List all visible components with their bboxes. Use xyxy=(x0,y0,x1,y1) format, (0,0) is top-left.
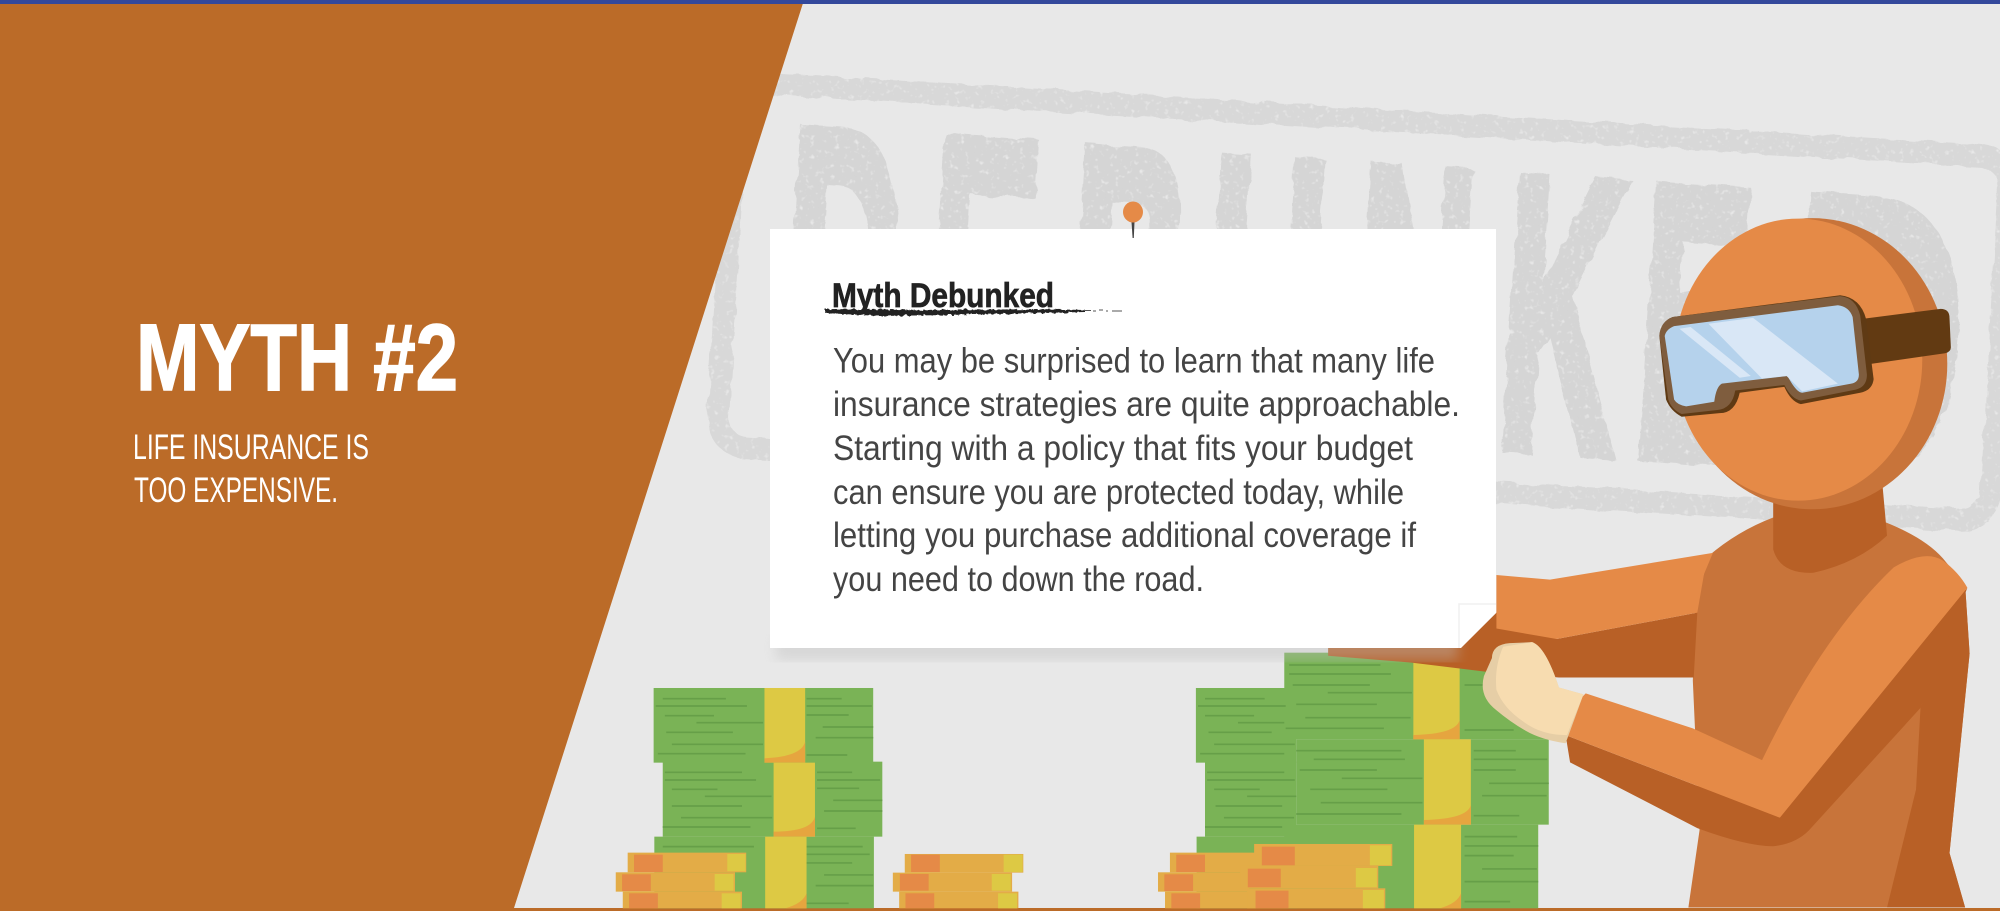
card fold xyxy=(1459,604,1496,648)
top bar xyxy=(0,0,2000,4)
figure: person with goggles xyxy=(1328,218,1970,907)
bottom strip xyxy=(0,908,2000,911)
card body text: insurance strategies are quite approachable. xyxy=(833,385,1460,424)
background stamp: debunked: DEBUNKE xyxy=(770,49,1762,542)
card body text: can ensure you are protected today, while xyxy=(833,473,1404,512)
back shading xyxy=(1887,585,1970,907)
head xyxy=(1674,218,1947,509)
money stacks and coins xyxy=(616,653,1549,908)
pin xyxy=(1123,202,1143,238)
brush underline xyxy=(825,309,1085,316)
right coin stack front xyxy=(1240,844,1392,908)
myth statement xyxy=(133,428,369,510)
heading: myth number: MYTH #2 xyxy=(136,305,458,411)
goggle frame xyxy=(1659,296,1867,414)
lens highlight xyxy=(1679,318,1838,391)
card body text: you need to down the road. xyxy=(833,560,1204,599)
card body text: letting you purchase additional coverage if xyxy=(833,516,1416,555)
neck xyxy=(1773,486,1887,573)
card shadow xyxy=(776,636,1458,660)
right bill stack xyxy=(1196,653,1549,908)
background stamp: debunked: D xyxy=(1777,115,1977,556)
card: myth debunked xyxy=(770,202,1496,648)
lower arm xyxy=(1566,556,1967,846)
left coin stack xyxy=(616,853,746,908)
middle coin stack xyxy=(893,854,1023,908)
left bill stack xyxy=(654,688,882,908)
myth statement: LIFE INSURANCE IS xyxy=(133,428,369,467)
torso xyxy=(1688,517,1970,907)
goggle lens xyxy=(1665,305,1859,406)
goggles xyxy=(1659,295,1951,417)
upper arm xyxy=(1328,553,1713,678)
goggle strap xyxy=(1862,309,1951,364)
goggle frame shadow xyxy=(1659,295,1874,417)
card heading: Myth Debunked xyxy=(832,277,1054,315)
hand xyxy=(1483,642,1583,743)
panel: myth title background xyxy=(0,0,804,911)
myth heading block xyxy=(133,305,458,510)
card body text: You may be surprised to learn that many life xyxy=(833,342,1435,380)
card body text xyxy=(833,342,1460,599)
right coin stack behind xyxy=(1158,853,1261,908)
myth statement: TOO EXPENSIVE. xyxy=(134,471,338,510)
card body text: Starting with a policy that fits your budget xyxy=(833,429,1413,468)
